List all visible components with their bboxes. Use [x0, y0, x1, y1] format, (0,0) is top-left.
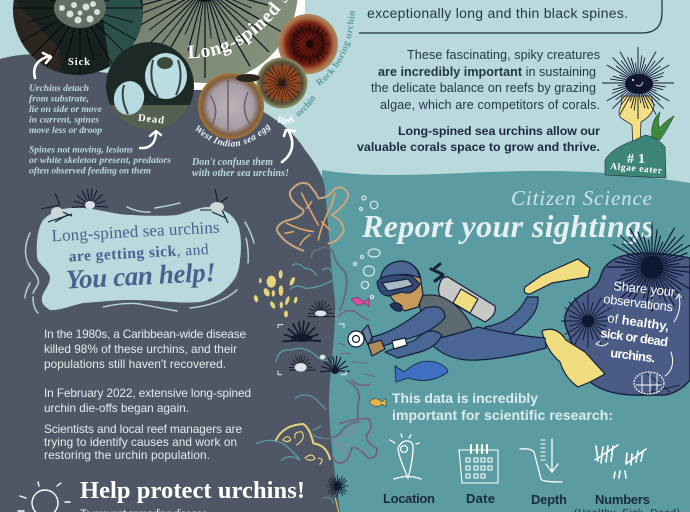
illustration: blob urchin	[561, 294, 615, 348]
text: history paragraphs: In February 2022, extensive long-spined	[44, 386, 251, 400]
wrist band	[392, 338, 407, 349]
photo: dead urchin	[106, 42, 194, 135]
heading: citizen science: Citizen Science	[511, 186, 652, 210]
text: history paragraphs: urchin die-offs began again.	[44, 401, 189, 415]
text: importance paragraph: These fascinating, spiky creatures	[407, 48, 600, 62]
illustration: big urchin	[607, 222, 690, 312]
text: share your observations: urchins.	[610, 345, 656, 365]
text: importance paragraph: valuable corals space to grow and thrive.	[357, 140, 600, 154]
text: share your observations: sick or dead	[600, 325, 669, 349]
text: importance paragraph: algae, which are competitors of corals.	[380, 98, 600, 112]
label: west indian sea egg: West Indian sea egg	[196, 124, 270, 147]
illustration: yellow sponge dots	[253, 270, 298, 317]
regulator	[390, 303, 402, 311]
head	[382, 261, 423, 311]
text: importance paragraph: are incredibly important in sustaining	[378, 65, 596, 79]
icon: depth	[520, 439, 562, 482]
arm	[372, 307, 445, 350]
text: sick description: lie on side or move	[29, 104, 103, 115]
bubbles	[354, 196, 380, 299]
illustration: lower fin	[542, 329, 605, 387]
photo: reef urchin	[256, 58, 308, 108]
text: history paragraphs: populations still haven't recovered.	[44, 357, 226, 371]
labels: data types: Numbers	[595, 492, 650, 507]
icon: location	[390, 434, 421, 479]
callout text	[51, 218, 223, 295]
text: history paragraphs: In the 1980s, a Caribbean-wide disease	[44, 327, 246, 341]
fish: pink	[351, 298, 369, 307]
photo: long-spined urchin	[132, 0, 298, 83]
teal wave over rock base	[600, 176, 690, 190]
label: rock boring urchin: Rock boring urchin	[316, 11, 355, 86]
panel: teal citizen science region	[320, 170, 690, 512]
callout text: You can help!	[65, 257, 217, 295]
mask	[377, 275, 420, 296]
label: Sick: Sick	[68, 57, 90, 68]
text: data importance	[392, 390, 613, 423]
text: importance paragraph: Long-spined sea urchins allow our	[398, 124, 600, 138]
fish: small orange	[369, 398, 386, 407]
glove	[368, 340, 385, 356]
icon: calendar	[459, 445, 498, 483]
text: dead description: or white skeleton present, predators	[29, 155, 171, 166]
camera	[362, 325, 372, 345]
labels: data types: Location	[383, 491, 435, 506]
text: importance paragraph	[357, 48, 600, 154]
arrow: to dead	[140, 131, 161, 148]
tank yellow band	[453, 289, 478, 313]
label: algae eater: Algae eater	[610, 162, 663, 177]
white photo frame	[190, 0, 305, 90]
text: history paragraphs	[44, 327, 251, 462]
icon: dead urchin in blob	[634, 372, 680, 396]
photo: sick urchin	[13, 0, 143, 75]
illustration: upper fin	[524, 259, 590, 294]
info box outline	[359, 0, 662, 33]
text: do not confuse	[191, 157, 289, 179]
illustration: coral and reef linework	[276, 183, 375, 377]
text: history paragraphs: killed 98% of these urchins, and their	[44, 342, 237, 356]
photo: west indian sea egg	[198, 73, 264, 139]
air tank	[438, 277, 495, 322]
label: #1: #1	[627, 152, 645, 167]
text: dead description	[29, 144, 171, 176]
arrow: to sick	[34, 53, 51, 78]
illustration: algae eater mascot	[602, 47, 674, 178]
labels: data types	[383, 491, 650, 507]
arrows in blob	[596, 294, 682, 376]
callout decorative swirls	[25, 203, 254, 313]
text: sick description: move less or droop	[29, 125, 102, 136]
torso vest	[418, 295, 475, 350]
illustration: diver	[348, 261, 546, 360]
callout text: Long-spined sea urchins	[51, 218, 220, 245]
illustration: lower reef linework	[257, 380, 377, 512]
text: sick description: Urchins detach	[29, 83, 89, 94]
text: history paragraphs: trying to identify causes and work on	[44, 435, 237, 449]
text: data importance: important for scientific research:	[392, 407, 613, 423]
rock	[605, 135, 666, 178]
text: share your observations: Share your	[613, 278, 677, 300]
label: reef: Reef	[277, 115, 294, 124]
labels: data types: Depth	[531, 492, 567, 507]
heading: report your sightings: Report your sightings	[361, 208, 654, 244]
text: history paragraphs: Scientists and local reef managers are	[44, 422, 242, 436]
callout text: are getting sick, and	[68, 241, 209, 265]
legs	[430, 327, 546, 360]
text: sick description	[29, 83, 103, 136]
second arm	[385, 331, 442, 358]
panel: slate left region	[0, 54, 340, 512]
text: sick description: in current, spines	[29, 114, 99, 126]
illustration: small reef urchins	[278, 300, 350, 375]
text: info box: exceptionally long and thin black spines.	[367, 5, 628, 21]
text: share your observations: observations	[603, 291, 674, 315]
tank valve	[431, 264, 443, 281]
text: importance paragraph: the delicate balance on reefs by grazing	[371, 81, 596, 95]
photo: rock boring urchin	[278, 14, 338, 74]
labels: data types: Date	[466, 491, 495, 506]
text: data importance: This data is incredibly	[392, 390, 538, 406]
text: do not confuse: Don't confuse them	[191, 157, 273, 168]
heading: help protect urchins: Help protect urchins!	[80, 477, 305, 504]
urchins on callout	[41, 188, 228, 223]
icon: sun	[18, 482, 70, 512]
text: do not confuse: with other sea urchins!	[192, 168, 289, 179]
arrow: to reef	[282, 130, 295, 162]
callout blob	[37, 207, 241, 310]
text: history paragraphs: restoring the urchin population.	[44, 448, 210, 462]
text: dead description: Spines not moving, lesions	[29, 144, 133, 156]
text: share your observations: of healthy,	[607, 310, 670, 334]
rear leg	[482, 297, 538, 348]
fish: blue	[395, 361, 448, 382]
text: dead description: often observed feeding on them	[29, 166, 151, 176]
icon: tally marks	[595, 445, 646, 478]
text: sick description: from substrate,	[29, 94, 89, 104]
label: urchin: urchin	[296, 96, 316, 116]
text: share your observations	[600, 278, 677, 365]
panel: share your observations blob	[565, 253, 690, 395]
hood	[380, 261, 420, 281]
label: Dead: Dead	[138, 113, 165, 126]
